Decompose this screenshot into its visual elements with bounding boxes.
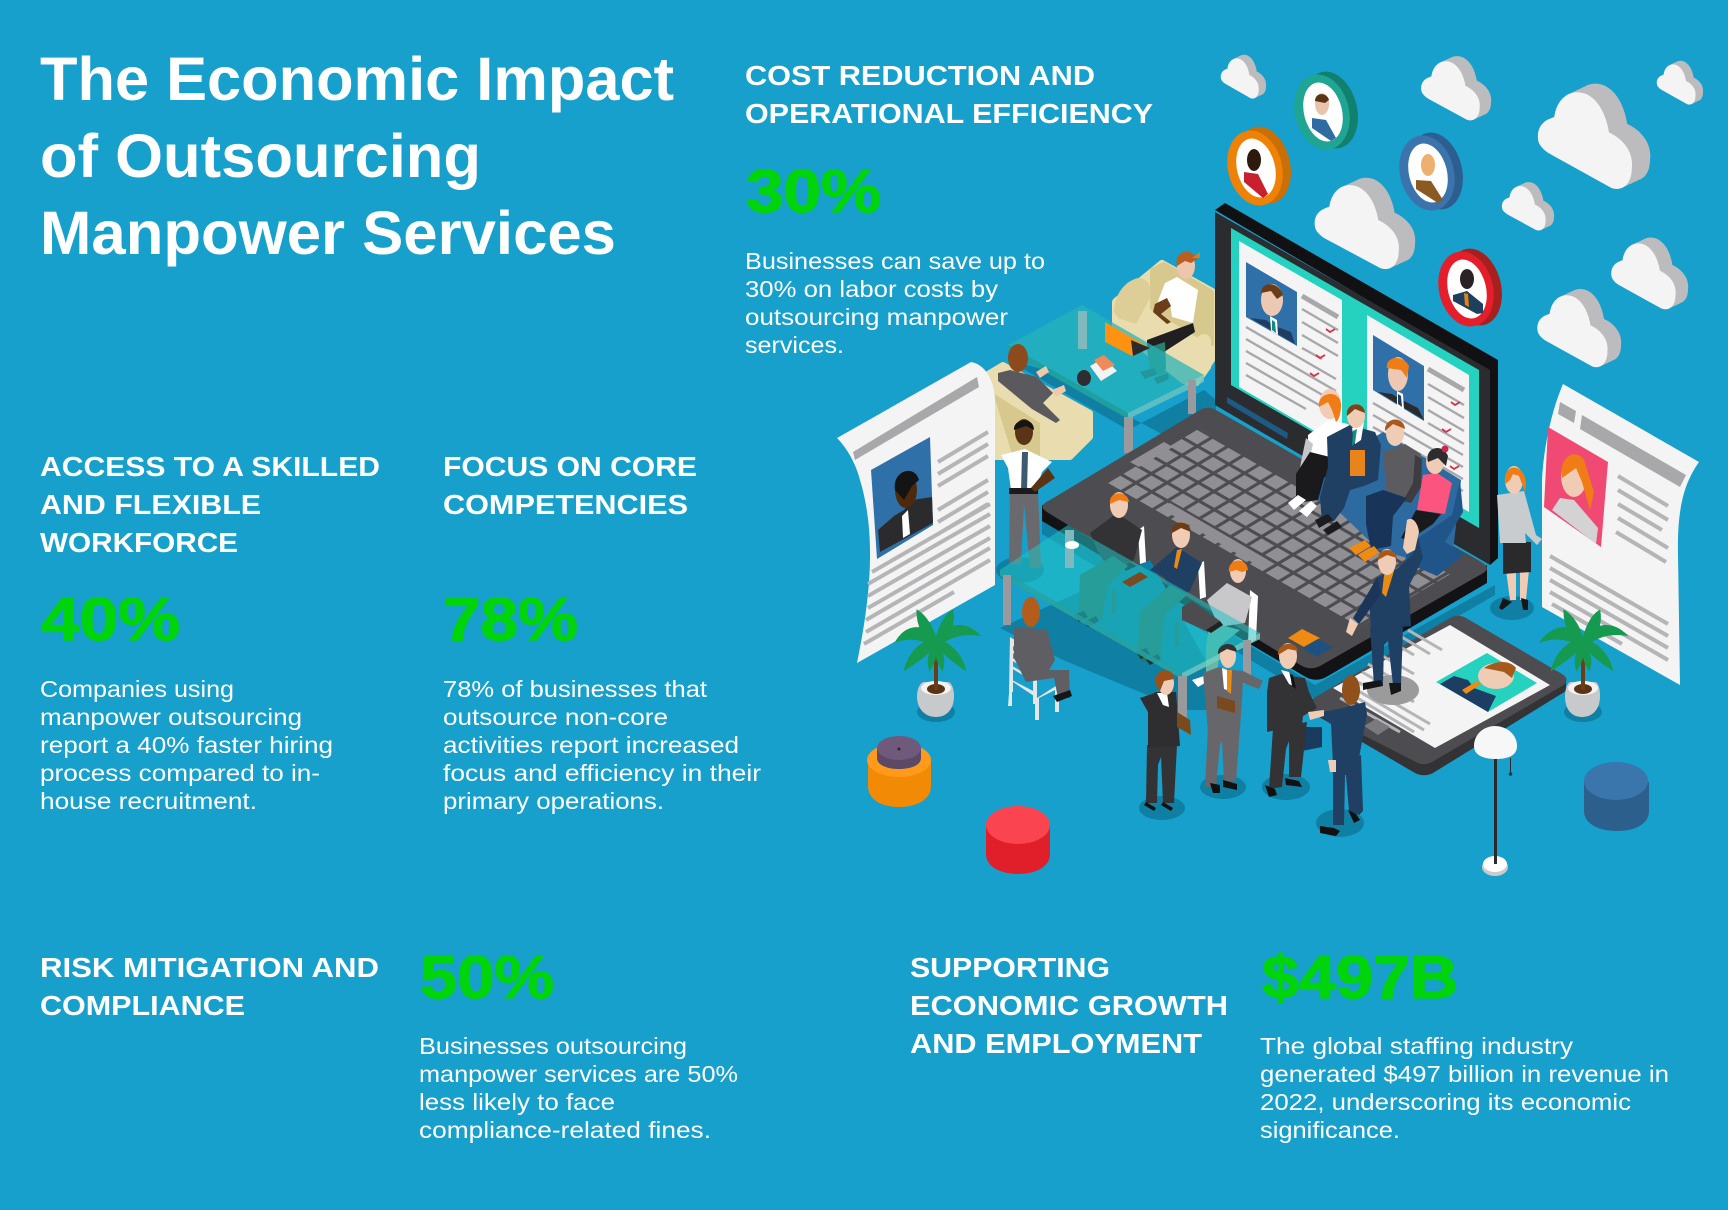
woman on sofa <box>1140 252 1200 384</box>
avatar badge: orange <box>1220 121 1299 211</box>
resume on screen: left <box>1239 241 1342 447</box>
tablet <box>1309 616 1566 775</box>
panel: risk mitigation <box>40 944 738 1143</box>
heading: skilled workforce <box>40 451 380 558</box>
heading: core competencies: COMPETENCIES <box>443 489 688 520</box>
standing man on tablet <box>1346 519 1423 705</box>
stat: $497B: $497B <box>1262 944 1458 1011</box>
heading: cost reduction <box>745 60 1153 129</box>
cylinder: orange with purple cap <box>867 736 931 807</box>
business group: man in navy, shaking hands <box>1308 675 1367 837</box>
body: core competencies: activities report increased <box>443 732 739 758</box>
body: core competencies: 78% of businesses that <box>443 676 707 702</box>
stat: 40%: 40% <box>41 586 180 653</box>
upper lounge: sofas, glass table and two people <box>983 252 1216 457</box>
plant: right <box>1543 612 1624 722</box>
table: upper glass <box>1008 305 1204 453</box>
resume on screen: right <box>1367 315 1469 512</box>
body: risk mitigation: compliance-related fines. <box>419 1117 711 1143</box>
body: economic growth: generated $497 billion in revenue in <box>1260 1061 1669 1087</box>
body: risk mitigation <box>419 1033 738 1143</box>
heading: core competencies <box>443 451 697 520</box>
panel: skilled workforce <box>40 451 380 814</box>
body: cost reduction: Businesses can save up to <box>745 248 1045 274</box>
body: risk mitigation: manpower services are 50% <box>419 1061 738 1087</box>
body: economic growth: The global staffing industry <box>1260 1033 1573 1059</box>
keys <box>1108 428 1452 627</box>
document: right resume <box>1542 384 1699 685</box>
heading: cost reduction: COST REDUCTION AND <box>745 60 1095 91</box>
heading: risk mitigation <box>40 952 379 1021</box>
body: economic growth <box>1260 1033 1669 1143</box>
heading: skilled workforce: ACCESS TO A SKILLED <box>40 451 380 482</box>
business group: man in grey <box>1200 644 1263 799</box>
seated man 2 <box>1136 522 1206 665</box>
body: core competencies: outsource non-core <box>443 704 668 730</box>
body: core competencies <box>443 676 761 814</box>
body: cost reduction: outsourcing manpower <box>745 304 1008 330</box>
title: of Outsourcing <box>40 122 481 190</box>
floor lamp <box>1474 726 1517 876</box>
body: skilled workforce: report a 40% faster hiring <box>40 732 333 758</box>
keyboard base <box>1042 408 1487 680</box>
seated group on keyboard <box>1288 389 1465 576</box>
heading: economic growth: SUPPORTING <box>910 952 1110 983</box>
body: skilled workforce: manpower outsourcing <box>40 704 302 730</box>
body: skilled workforce <box>40 676 333 814</box>
heading: core competencies: FOCUS ON CORE <box>443 451 697 482</box>
avatar badge: teal <box>1287 66 1366 155</box>
body: core competencies: focus and efficiency in their <box>443 760 761 786</box>
stat: 50%: 50% <box>420 944 554 1011</box>
table shadow <box>1000 560 1233 710</box>
heading: risk mitigation: RISK MITIGATION AND <box>40 952 379 983</box>
standing woman near laptop <box>1490 466 1542 620</box>
seated man in grey <box>1349 419 1422 562</box>
body: skilled workforce: Companies using <box>40 676 234 702</box>
clouds <box>1221 55 1703 367</box>
business group: man in black <box>1262 643 1322 800</box>
heading: risk mitigation: COMPLIANCE <box>40 990 245 1021</box>
seated man in navy <box>1315 404 1381 535</box>
laptop <box>1042 203 1498 699</box>
body: risk mitigation: less likely to face <box>419 1089 615 1115</box>
sofa: lower <box>983 365 1090 457</box>
lower glass table group <box>1000 492 1260 726</box>
sofa: upper <box>1114 264 1212 382</box>
body: risk mitigation: Businesses outsourcing <box>419 1033 687 1059</box>
cylinder: red <box>986 806 1050 874</box>
panel: economic growth <box>910 944 1669 1143</box>
heading: skilled workforce: AND FLEXIBLE <box>40 489 261 520</box>
heading: cost reduction: OPERATIONAL EFFICIENCY <box>745 98 1153 129</box>
table: lower glass <box>1000 525 1260 726</box>
laptop shadow <box>1042 520 1495 699</box>
body: economic growth: 2022, underscoring its economic <box>1260 1089 1631 1115</box>
body: cost reduction <box>745 248 1045 358</box>
title: Manpower Services <box>40 199 616 267</box>
floor shadow <box>1008 360 1216 439</box>
panel: core competencies <box>443 451 761 814</box>
body: skilled workforce: house recruitment. <box>40 788 257 814</box>
panel: cost reduction <box>745 60 1153 358</box>
man on white chair <box>1008 597 1072 720</box>
plant: left <box>898 612 977 722</box>
stat: 30%: 30% <box>746 158 881 225</box>
standing man in white shirt <box>996 419 1055 583</box>
man on sofa <box>998 344 1066 423</box>
laptop chips <box>1288 629 1333 657</box>
screen <box>1215 203 1498 565</box>
stat: 78%: 78% <box>443 586 578 653</box>
document: left resume <box>837 362 995 663</box>
business group: woman <box>1139 670 1191 820</box>
avatar badge: blue <box>1392 127 1471 216</box>
blue seats <box>1307 432 1461 568</box>
body: cost reduction: services. <box>745 332 844 358</box>
title: The Economic Impact <box>40 45 674 113</box>
cylinder: blue <box>1584 762 1649 831</box>
heading: economic growth: AND EMPLOYMENT <box>910 1028 1202 1059</box>
seated woman <box>1288 389 1358 517</box>
body: cost reduction: 30% on labor costs by <box>745 276 998 302</box>
seated man 1 <box>1074 492 1146 627</box>
body: skilled workforce: process compared to in- <box>40 760 320 786</box>
seated woman in pink <box>1401 446 1452 540</box>
seated woman 3 <box>1192 559 1258 687</box>
heading: economic growth: ECONOMIC GROWTH <box>910 990 1228 1021</box>
body: economic growth: significance. <box>1260 1117 1400 1143</box>
heading: economic growth <box>910 952 1228 1059</box>
illustration: isometric outsourcing office <box>837 55 1703 876</box>
avatar badge: red <box>1431 243 1510 332</box>
heading: skilled workforce: WORKFORCE <box>40 527 238 558</box>
title <box>40 45 674 267</box>
body: core competencies: primary operations. <box>443 788 664 814</box>
